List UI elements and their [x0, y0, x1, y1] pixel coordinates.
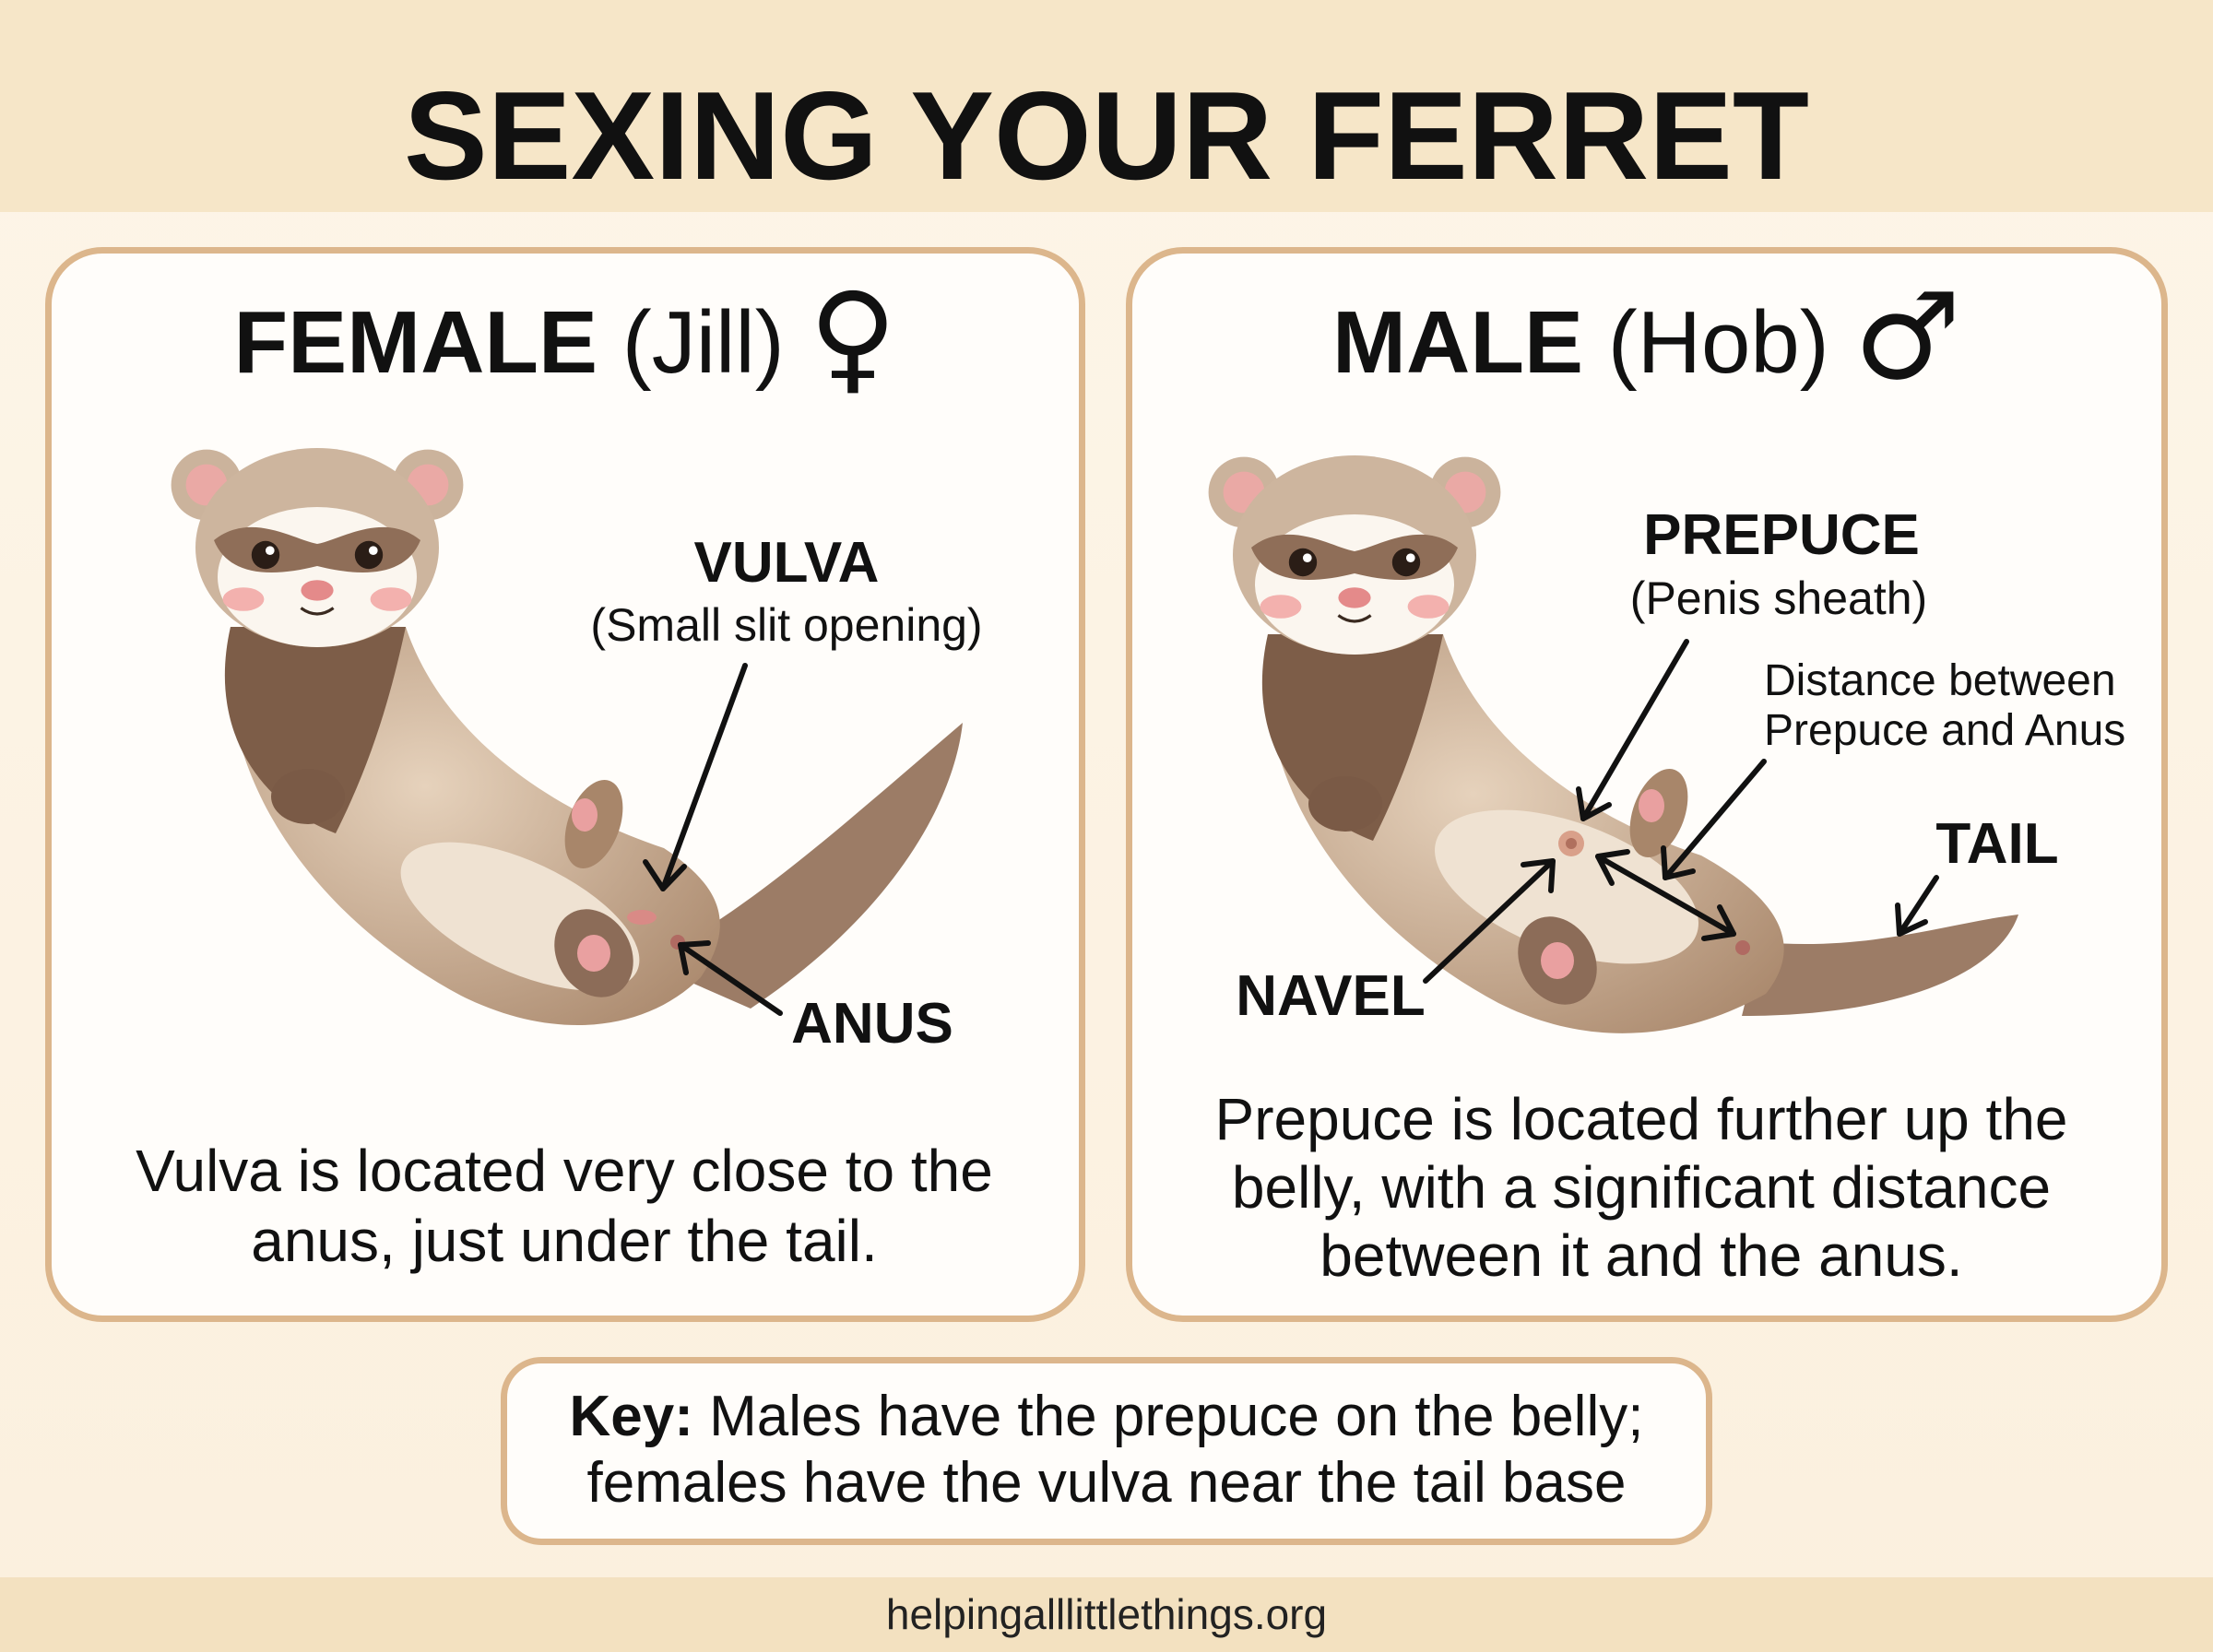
- anatomy marks: male: [1558, 831, 1750, 955]
- arrow: double: [1598, 852, 1734, 938]
- label: tail: TAIL: [1935, 812, 2059, 876]
- label: navel: NAVEL: [1236, 964, 1426, 1028]
- label: distance: [1764, 656, 2125, 755]
- key box: females have the vulva near the tail base: [586, 1451, 1627, 1515]
- text: female description: Vulva is located very close to the: [136, 1138, 993, 1204]
- heading: female: FEMALE (Jill) ♀: [233, 266, 897, 407]
- label: distance: Prepuce and Anus: [1764, 706, 2125, 755]
- label: small slit: (Small slit opening): [590, 599, 983, 651]
- anatomy marks: female: [627, 910, 685, 950]
- label: anus: ANUS: [791, 992, 953, 1056]
- panel: female: [45, 247, 1085, 1322]
- key box: [501, 1357, 1712, 1545]
- text: male description: Prepuce is located further up the: [1215, 1086, 2067, 1152]
- text: male description: between it and the anus.: [1320, 1222, 1963, 1289]
- arrow: prepuce: [1579, 642, 1686, 819]
- arrow: vulva: [645, 666, 745, 889]
- footer band: [0, 1577, 2213, 1652]
- arrow: tail: [1898, 878, 1936, 934]
- arrow: navel: [1426, 861, 1553, 981]
- arrow: anus: [680, 943, 780, 1013]
- arrows: [645, 642, 1936, 1013]
- text: female description: anus, just under the tail.: [251, 1208, 878, 1274]
- header band: [0, 0, 2213, 212]
- text: male description: [1215, 1086, 2067, 1289]
- ferret: female: [172, 448, 963, 1025]
- text: female description: [136, 1138, 993, 1274]
- text: male description: belly, with a significant distance: [1232, 1154, 2051, 1221]
- panel: male: [1126, 247, 2168, 1322]
- footer band: helpingalllittlethings.org: [886, 1590, 1327, 1638]
- label: prepuce: PREPUCE: [1643, 503, 1920, 567]
- key box: Key: Males have the prepuce on the belly;: [570, 1385, 1643, 1448]
- label: vulva: VULVA: [694, 531, 879, 595]
- title: SEXING YOUR FERRET: [404, 65, 1809, 206]
- label: penis sheath: (Penis sheath): [1630, 572, 1927, 624]
- label: distance: Distance between: [1764, 656, 2116, 705]
- ferret: male: [1209, 455, 2018, 1033]
- arrow: distance: [1663, 761, 1764, 878]
- heading: male: MALE (Hob) ♂: [1332, 266, 1961, 407]
